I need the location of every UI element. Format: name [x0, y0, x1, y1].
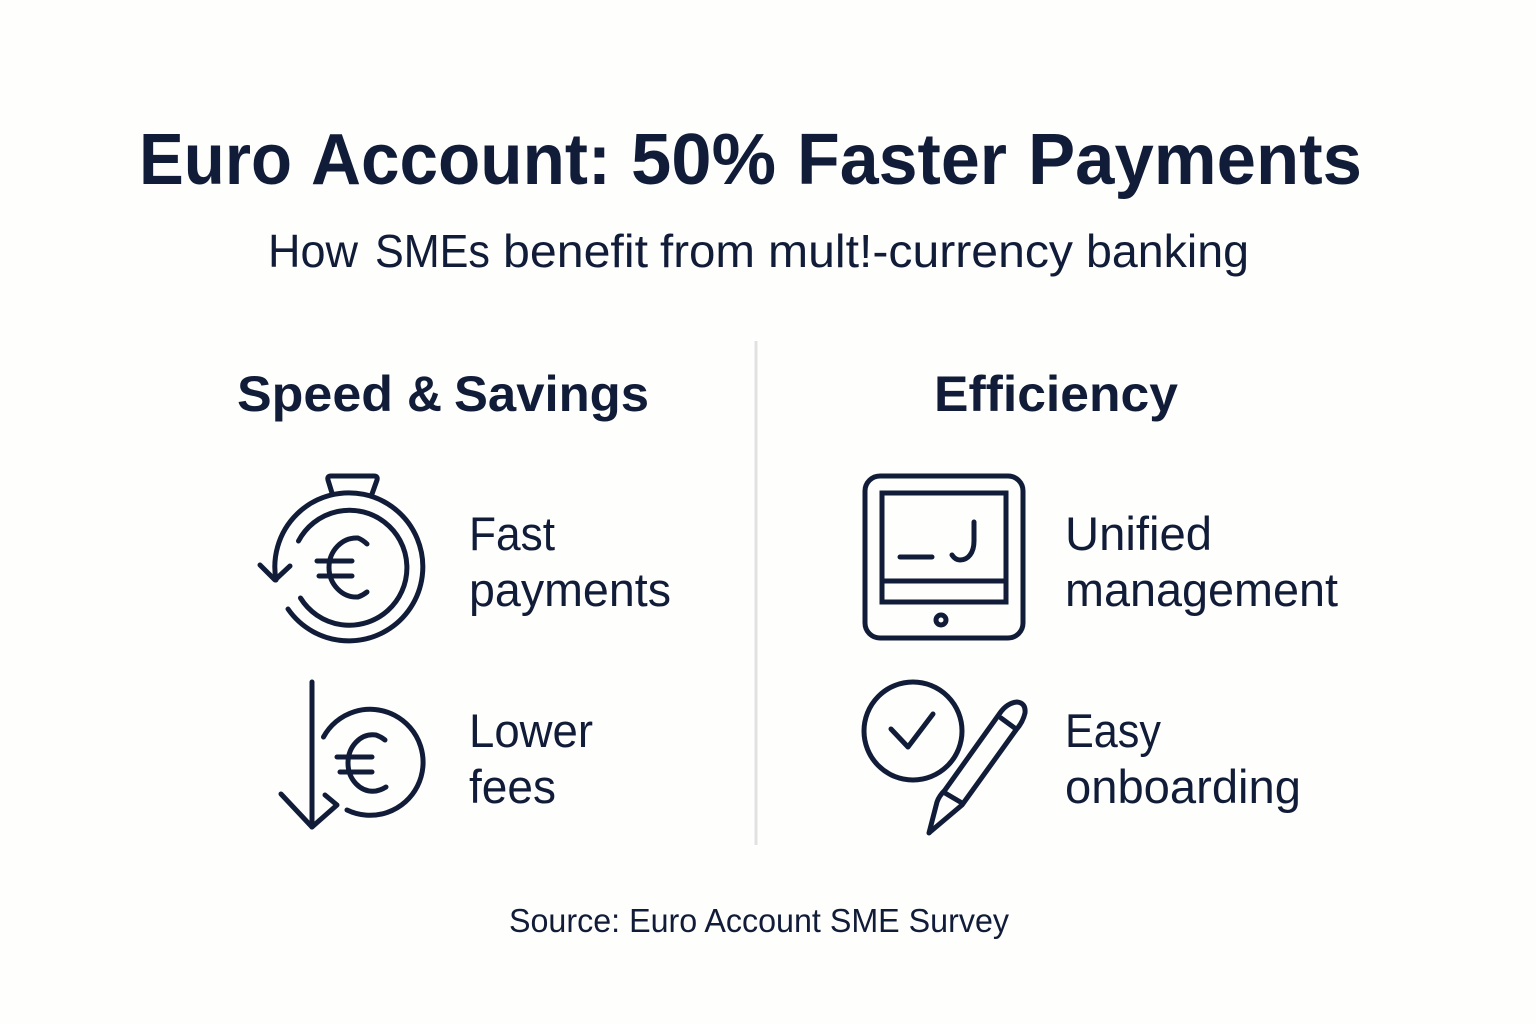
source note: Source: Euro Account SME Survey: [509, 902, 1009, 939]
text: lower fees: Lower: [469, 704, 593, 757]
heading: speed and savings: [237, 366, 649, 422]
text: fast payments: [469, 507, 671, 616]
text: fast payments: payments: [469, 563, 671, 616]
text: easy onboarding: onboarding: [1065, 760, 1301, 813]
text: fast payments: Fast: [469, 507, 555, 560]
subtitle: banking: [1086, 225, 1249, 277]
heading: speed and savings: Speed: [237, 366, 393, 422]
panel: efficiency: [864, 366, 1338, 833]
subtitle: How: [268, 225, 359, 277]
subtitle: mult!-currency: [768, 225, 1073, 277]
title: Account:: [311, 120, 611, 200]
text: easy onboarding: Easy: [1065, 704, 1161, 757]
icon: check and pencil: [864, 682, 1025, 833]
panel: speed and savings: [237, 366, 671, 827]
text: lower fees: fees: [469, 760, 556, 813]
heading: speed and savings: &: [407, 366, 442, 422]
subtitle: from: [660, 225, 755, 277]
text: unified management: Unified: [1065, 507, 1212, 560]
icon: tablet: [865, 476, 1023, 638]
title: Faster: [797, 120, 1007, 200]
title: 50%: [631, 120, 776, 200]
heading: efficiency: Efficiency: [934, 366, 1178, 422]
title: Euro: [139, 120, 292, 200]
text: unified management: management: [1065, 563, 1338, 616]
text: lower fees: [469, 704, 593, 813]
title: Payments: [1028, 120, 1362, 200]
subtitle: SMEs: [375, 225, 490, 277]
subtitle: [268, 225, 1249, 277]
icon: euro with down arrow: [281, 682, 423, 827]
heading: speed and savings: Savings: [454, 366, 649, 422]
subtitle: benefit: [503, 225, 648, 277]
text: unified management: [1065, 507, 1338, 616]
text: easy onboarding: [1065, 704, 1301, 813]
icon: euro stopwatch: [260, 476, 423, 641]
title: [139, 120, 1362, 200]
